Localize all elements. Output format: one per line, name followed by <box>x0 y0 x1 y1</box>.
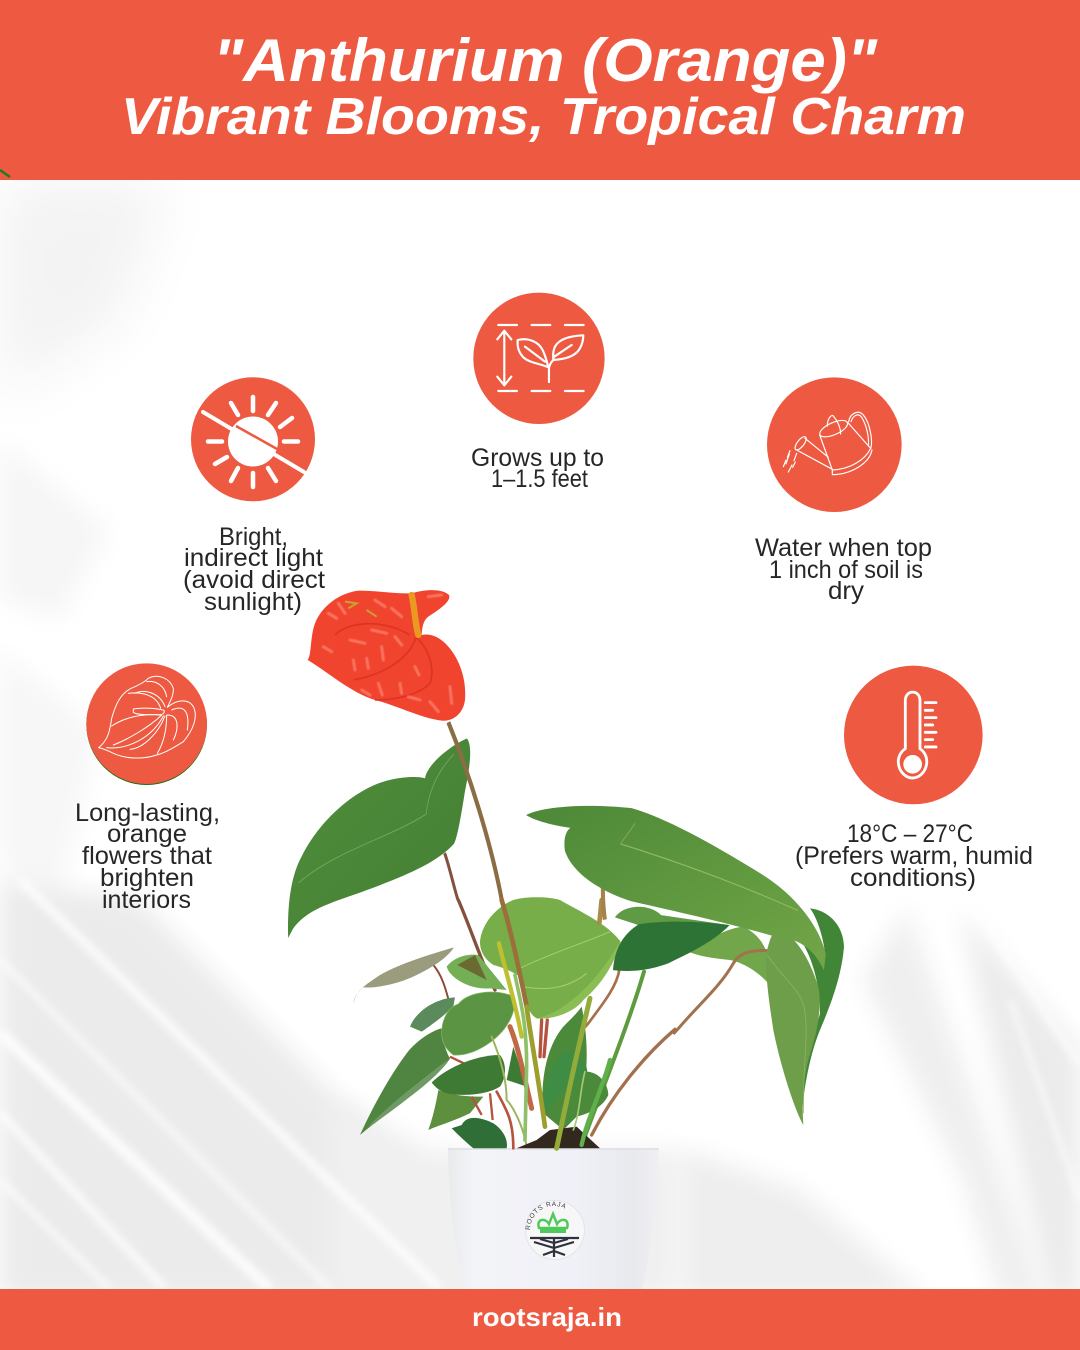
bright centre leaf <box>480 897 621 1019</box>
icon: plant height <box>473 293 605 424</box>
label: light: indirect light <box>184 544 323 572</box>
pot sticker: roots raja logo <box>525 1200 585 1260</box>
icon: anthurium flower outline <box>86 663 207 785</box>
label: height: Grows up to <box>471 444 604 472</box>
header band <box>0 0 1080 180</box>
front hanging leaf <box>766 930 820 1125</box>
label: light: (avoid direct <box>183 566 325 594</box>
light leaf <box>688 927 768 983</box>
label: flowers: brighten <box>100 864 194 892</box>
stem pieces under the round leaf <box>450 1057 493 1120</box>
label: water <box>755 534 932 605</box>
label: water: 1 inch of soil is <box>769 556 923 584</box>
label: water: Water when top <box>755 534 932 562</box>
subtitle: Vibrant Blooms, Tropical Charm <box>121 88 966 146</box>
label: height <box>471 444 604 493</box>
upper right leaves <box>673 908 844 1125</box>
small leaf: brown variegated <box>353 947 454 1003</box>
centre-back leaf mass <box>507 1007 608 1130</box>
bottom dark leaves <box>452 1118 507 1148</box>
back dark hanging leaf <box>802 908 844 1107</box>
soil <box>517 1127 600 1148</box>
icon: watering can <box>767 377 902 512</box>
label: temperature <box>795 820 1033 892</box>
label: water: dry <box>828 577 865 605</box>
lower cluster of leaves and stems <box>353 897 675 1148</box>
label: temperature: (Prefers warm, humid <box>795 842 1033 870</box>
big lower-left leaf <box>360 1028 450 1135</box>
lower leaf <box>428 1090 483 1130</box>
pot <box>448 1148 659 1290</box>
petiole <box>673 951 767 1034</box>
icon: thermometer <box>844 666 983 804</box>
small leaf: back with brown fold <box>447 955 507 990</box>
stems in the crown <box>492 1020 547 1148</box>
label: flowers: interiors <box>102 886 191 914</box>
label: temperature: 18°C – 27°C <box>847 820 973 848</box>
label: flowers: flowers that <box>82 842 212 870</box>
dark mid leaf <box>432 1055 505 1095</box>
upper left leaf with stem <box>288 722 502 938</box>
label: light: Bright, <box>219 523 288 551</box>
icon: no direct sun <box>191 377 315 501</box>
title: "Anthurium (Orange)" <box>213 27 879 94</box>
foreground stems <box>499 900 610 1148</box>
footer website: rootsraja.in <box>472 1302 622 1332</box>
small leaf: dark <box>410 997 455 1032</box>
label: flowers <box>75 799 220 914</box>
dark mid leaf and big top-right leaf <box>526 806 826 971</box>
round leaf <box>442 992 514 1055</box>
label: light: sunlight) <box>204 588 302 616</box>
flower: orange anthurium <box>308 590 465 721</box>
label: flowers: orange <box>107 820 187 848</box>
footer band <box>0 1289 1080 1350</box>
label: height: 1–1.5 feet <box>491 465 588 493</box>
label: light <box>183 523 325 616</box>
pot sticker: roots raja logo: ROOTS RAJA <box>526 1202 566 1230</box>
label: temperature: conditions) <box>850 864 976 892</box>
label: flowers: Long-lasting, <box>75 799 220 827</box>
plant photo <box>288 590 844 1289</box>
